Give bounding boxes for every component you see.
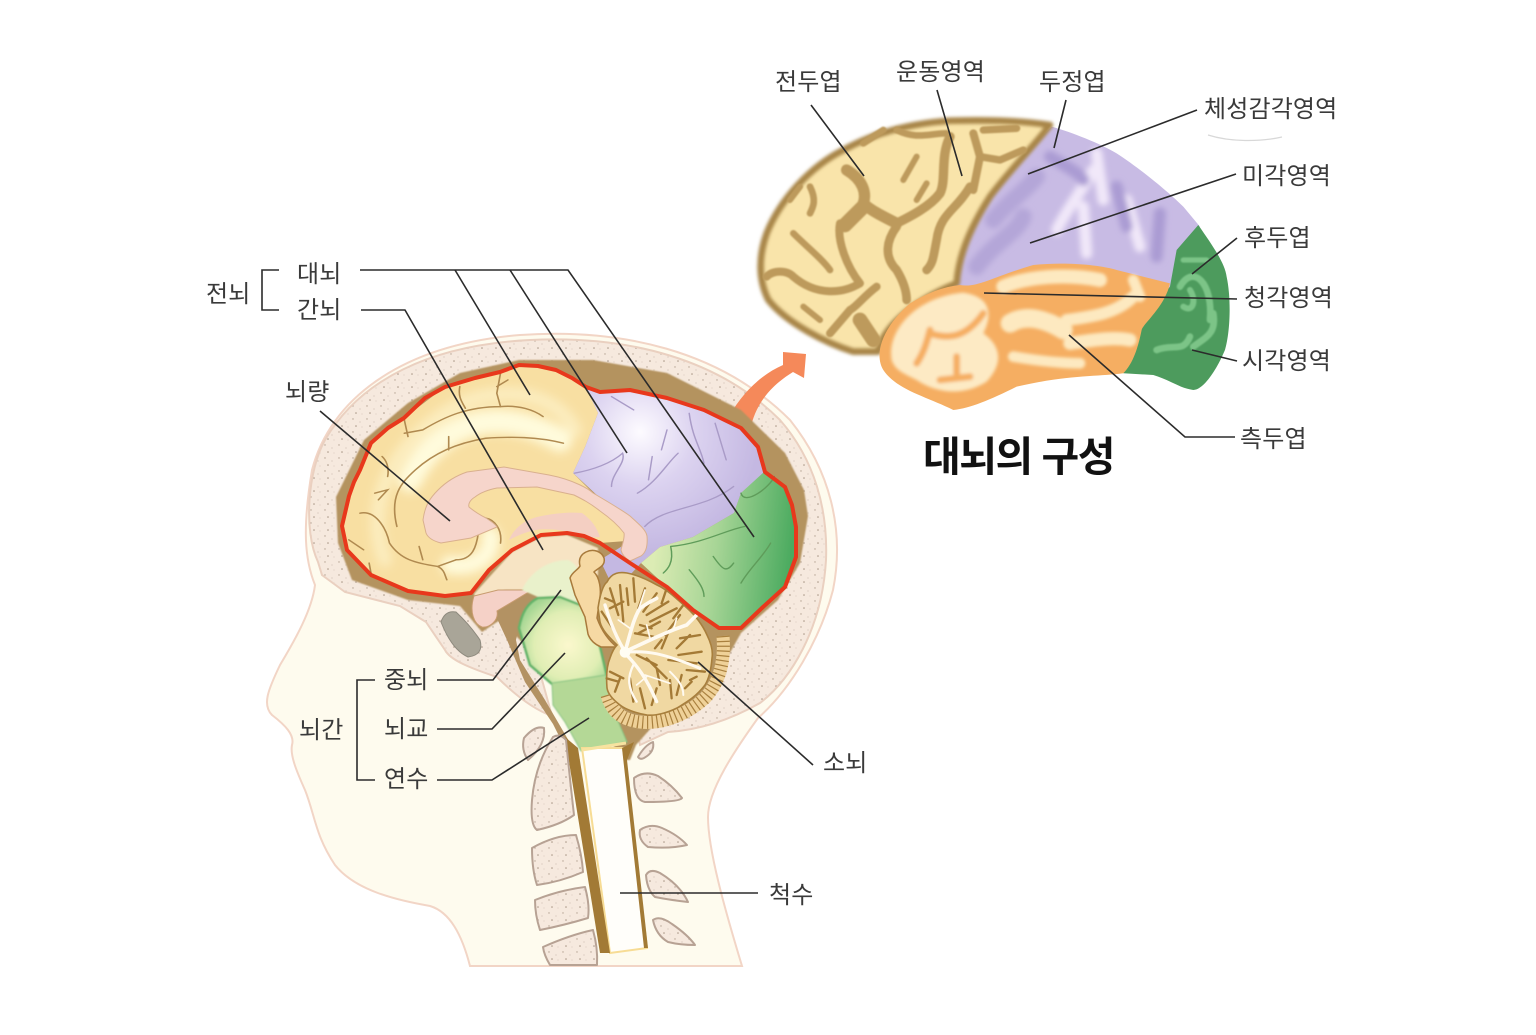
labels: forebrain group: 대뇌 (297, 261, 341, 288)
diencephalon (474, 535, 598, 603)
labels: cerebrum areas: 체성감각영역 (1204, 96, 1337, 123)
fornix (509, 513, 600, 540)
leader lines: left diagram (262, 270, 813, 893)
frontal sulci (767, 128, 1023, 340)
frontal sinus (441, 612, 481, 657)
region: frontal yellow (342, 365, 640, 596)
medulla (552, 675, 627, 751)
label: corpus callosum: 뇌량 (285, 379, 329, 406)
vertebrae (523, 727, 695, 965)
dura layer (336, 360, 808, 760)
skull bone (309, 339, 826, 745)
labels: brainstem group: 중뇌 (384, 667, 428, 694)
lobules (598, 573, 712, 715)
temporal gyri (891, 293, 998, 392)
panel: brainstem (519, 560, 627, 751)
labels: cerebrum areas: 두정엽 (1039, 69, 1106, 96)
sulci lines (349, 373, 774, 596)
spinal dura back (622, 742, 648, 948)
labels: cerebrum areas: 전두엽 (775, 69, 842, 96)
leader lines: right diagram (811, 90, 1237, 437)
folia (602, 578, 705, 708)
panel: cerebellum (598, 573, 723, 722)
labels: cerebrum areas: 청각영역 (1244, 285, 1333, 312)
head silhouette (267, 334, 837, 966)
label: cerebellum: 소뇌 (823, 750, 867, 777)
faint mark under 체성감각영역 (1208, 135, 1282, 141)
labels: cerebrum areas: 후두엽 (1244, 225, 1311, 252)
occipital lobe (1123, 225, 1230, 390)
labels: brainstem group: 뇌간 (299, 717, 343, 744)
pons (519, 597, 607, 684)
label: spinal cord: 척수 (769, 882, 813, 909)
region: parietal purple (573, 387, 765, 585)
spinal cord (582, 748, 647, 953)
title: composition of the cerebrum: 대뇌의 구성 (923, 434, 1114, 480)
labels: cerebrum areas: 측두엽 (1240, 426, 1307, 453)
frontal lobe (761, 120, 1050, 352)
spinal dura front (565, 737, 610, 953)
pineal tectum structure (570, 550, 617, 647)
labels: cerebrum areas: 시각영역 (1242, 348, 1331, 375)
panel: cervical spine (523, 727, 695, 965)
panel: cerebrum lateral view (761, 120, 1230, 410)
frontal rim (761, 120, 1050, 352)
labels: cerebrum areas (775, 59, 1337, 453)
ribbed outer band (607, 636, 723, 722)
highlights: frontal gyri (378, 394, 575, 566)
cerebrum outline in red (342, 365, 796, 628)
corpus callosum (423, 467, 647, 561)
parietal lobe (950, 127, 1200, 300)
tan wedge behind brainstem (494, 575, 580, 762)
labels: brainstem group: 뇌교 (384, 716, 428, 743)
temporal lobe (880, 264, 1170, 410)
labels: cerebrum areas: 미각영역 (1242, 163, 1331, 190)
labels: forebrain group: 간뇌 (297, 297, 341, 324)
medulla base line (582, 743, 626, 750)
labels: brainstem group (299, 667, 428, 793)
midbrain (522, 560, 596, 618)
panel: cerebrum sagittal section (342, 365, 796, 628)
labels: forebrain group: 전뇌 (206, 281, 250, 308)
region: occipital green (641, 472, 796, 628)
labels: cerebrum areas: 운동영역 (896, 59, 985, 86)
labels: forebrain group (206, 261, 341, 324)
icon: arrow from brain to cerebrum detail (726, 352, 806, 430)
folia and arbor vitae (602, 578, 705, 708)
labels: brainstem group: 연수 (384, 766, 428, 793)
pituitary stalk (472, 573, 543, 627)
arbor vitae (605, 590, 700, 702)
